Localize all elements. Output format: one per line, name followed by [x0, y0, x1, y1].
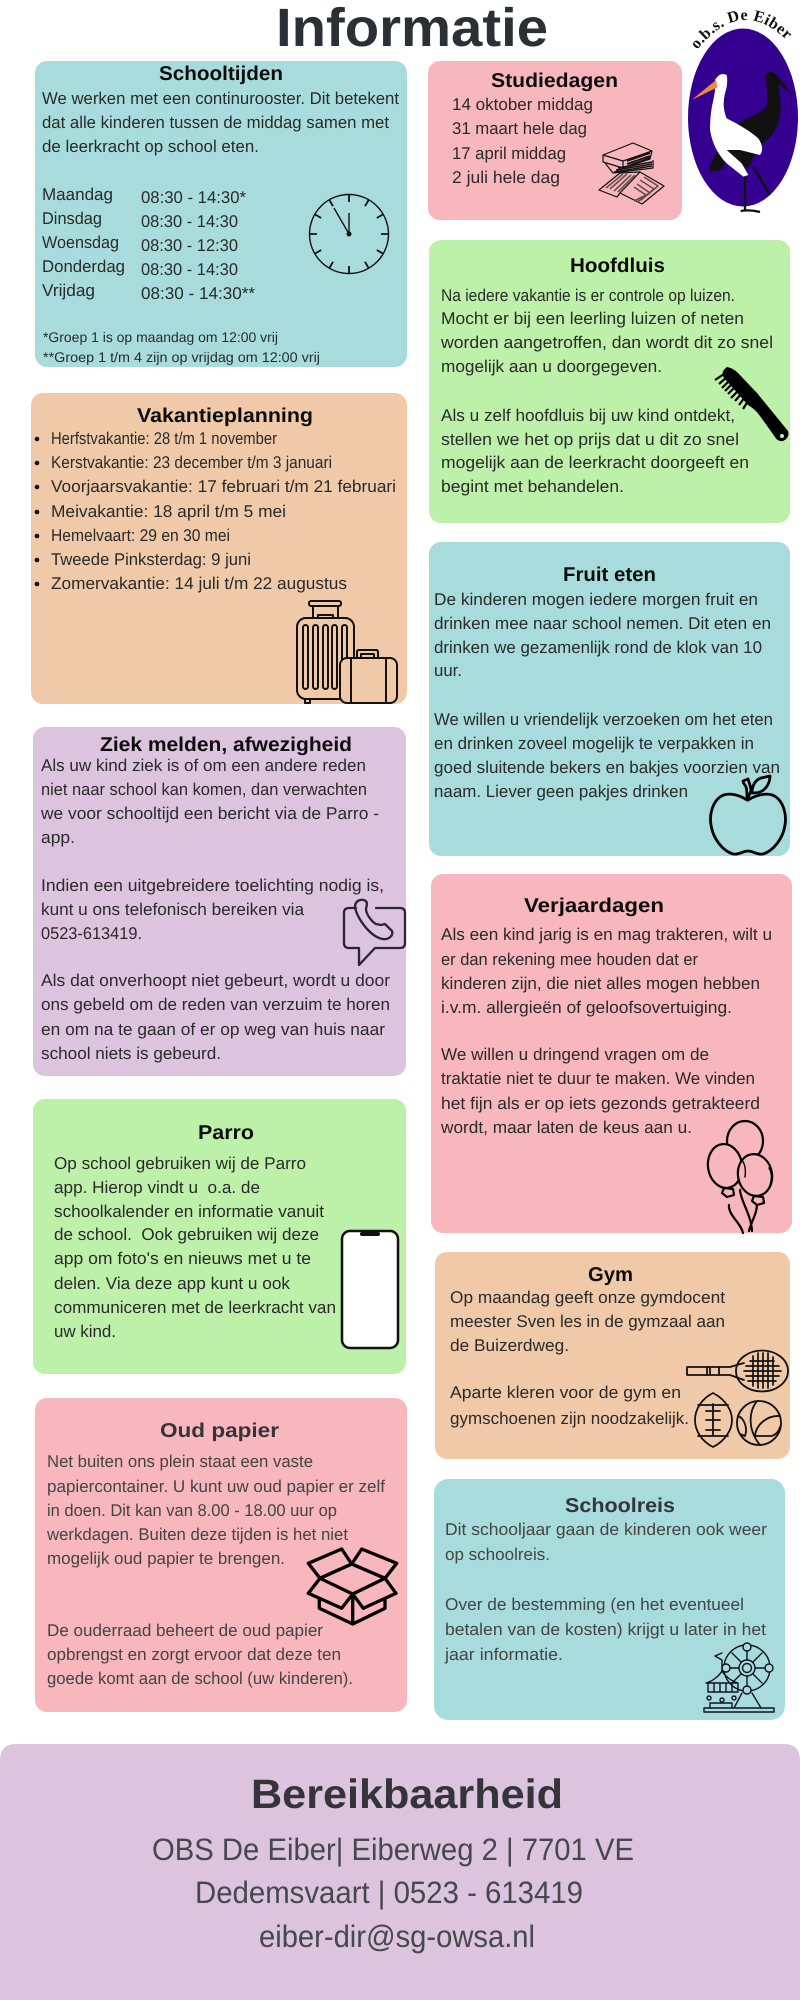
fruit text: naam. Liever geen pakjes drinken: [434, 782, 688, 801]
birthday text: i.v.m. allergieën of geloofsovertuiging.: [441, 998, 732, 1017]
gym text: gymschoenen zijn noodzakelijk.: [450, 1409, 689, 1428]
panel: Oud papier: [35, 1398, 407, 1712]
panel: Vakantieplanning: [31, 393, 407, 704]
footnotes: [43, 329, 320, 365]
holiday list: Herfstvakantie: 28 t/m 1 november: [51, 429, 277, 448]
school trip text: op schoolreis.: [445, 1545, 550, 1564]
lice text: worden aangetroffen, dan wordt dit zo snel: [440, 333, 773, 352]
intro text: dat alle kinderen tussen de middag samen met: [42, 113, 389, 132]
stork legs: [741, 167, 770, 212]
icon: books: [599, 143, 664, 204]
weekdays: Dinsdag: [42, 209, 102, 228]
lice text: mogelijk aan de leerkracht doorgeeft en: [441, 453, 749, 472]
fruit text: drinken we gezamenlijk rond de klok van 10: [434, 638, 762, 657]
panel: Ziek melden, afwezigheid: [33, 727, 406, 1076]
icon: apple: [710, 776, 786, 854]
Parro text: delen. Via deze app kunt u ook: [54, 1274, 290, 1293]
absence text: school niets is gebeurd.: [41, 1044, 221, 1063]
icon: luggage: [297, 601, 397, 703]
holiday list: Kerstvakantie: 23 december t/m 3 januari: [51, 453, 332, 472]
school trip text: jaar informatie.: [444, 1645, 563, 1664]
gym text: Aparte kleren voor de gym en: [450, 1383, 681, 1402]
birthday text: traktatie niet te duur te maken. We vinden: [441, 1069, 755, 1088]
heading: Verjaardagen: Verjaardagen: [524, 895, 664, 917]
study days list: [452, 95, 593, 187]
icon: basketball: [737, 1401, 781, 1445]
holiday list: Hemelvaart: 29 en 30 mei: [51, 526, 230, 545]
lice text: Na iedere vakantie is er controle op luizen.: [441, 286, 735, 305]
study days list: 14 oktober middag: [452, 95, 593, 114]
holiday list: Tweede Pinksterdag: 9 juni: [51, 550, 251, 569]
panel: Schooltijden: [35, 61, 407, 367]
Parro text: [54, 1154, 336, 1341]
Parro text: uw kind.: [54, 1322, 116, 1341]
icon: rugby ball: [695, 1393, 732, 1447]
absence text: Indien een uitgebreidere toelichting nodig is,: [41, 876, 384, 895]
paper text: papiercontainer. U kunt uw oud papier er zelf: [47, 1477, 385, 1496]
icon: clock: [310, 194, 388, 274]
birthday text: kinderen zijn, die niet alles mogen hebben: [441, 974, 760, 993]
intro text: [42, 89, 399, 156]
paper text: opbrengst en zorgt ervoor dat deze ten: [47, 1645, 341, 1664]
weekdays: Donderdag: [42, 257, 125, 276]
lice text: [440, 286, 773, 496]
paper text: Net buiten ons plein staat een vaste: [47, 1452, 313, 1471]
lice text: begint met behandelen.: [441, 477, 624, 496]
paper text: werkdagen. Buiten deze tijden is het niet: [46, 1525, 348, 1544]
heading: Parro: Parro: [198, 1122, 254, 1144]
black stork: [710, 72, 794, 172]
birthday text: er dan rekening mee houden dat er: [441, 950, 698, 969]
Parro text: Op school gebruiken wij de Parro: [54, 1154, 306, 1173]
absence text: Als dat onverhoopt niet gebeurt, wordt u door: [41, 971, 390, 990]
panel: Parro: [33, 1099, 406, 1374]
intro text: de leerkracht op school eten.: [42, 137, 259, 156]
gym text: de Buizerdweg.: [450, 1336, 569, 1355]
contact details: Dedemsvaart | 0523 - 613419: [195, 1875, 583, 1910]
paper text: De ouderraad beheert de oud papier: [47, 1621, 323, 1640]
holiday list: [35, 429, 396, 593]
absence text: [40, 756, 390, 1063]
heading: Fruit eten: Fruit eten: [563, 564, 656, 586]
icon: smartphone: [342, 1231, 398, 1348]
holiday list: Meivakantie: 18 april t/m 5 mei: [51, 502, 286, 521]
school times: 08:30 - 12:30: [141, 236, 238, 255]
absence text: 0523-613419.: [41, 924, 142, 943]
heading: Vakantieplanning: Vakantieplanning: [137, 405, 313, 427]
fruit text: We willen u vriendelijk verzoeken om het eten: [434, 710, 773, 729]
absence text: we voor schooltijd een bericht via de Parro -: [40, 804, 379, 823]
panel: Schoolreis: [434, 1479, 785, 1720]
gym text: meester Sven les in de gymzaal aan: [450, 1312, 725, 1331]
panel: Gym: [435, 1252, 790, 1459]
footnotes: *Groep 1 is op maandag om 12:00 vrij: [43, 329, 278, 345]
icon: balloons: [705, 1121, 775, 1233]
Parro text: de school. Ook gebruiken wij deze: [54, 1225, 319, 1244]
weekdays: Vrijdag: [42, 281, 95, 300]
panel: Verjaardagen: [431, 874, 792, 1233]
weekdays: Woensdag: [42, 233, 119, 252]
Parro text: app om foto's en nieuws met u te: [54, 1249, 311, 1268]
absence text: kunt u ons telefonisch bereiken via: [41, 900, 305, 919]
school trip text: Dit schooljaar gaan de kinderen ook weer: [445, 1520, 767, 1539]
school trip text: betalen van de kosten) krijgt u later in het: [445, 1620, 766, 1639]
absence text: ons gebeld om de reden van verzuim te horen: [41, 995, 390, 1014]
lice text: stellen we het op prijs dat u dit zo snel: [441, 430, 739, 449]
holiday list: Voorjaarsvakantie: 17 februari t/m 21 februari: [51, 477, 396, 496]
birthday text: [440, 925, 772, 1137]
study days list: 31 maart hele dag: [452, 119, 587, 138]
panel: Studiedagen: [428, 61, 682, 220]
absence text: niet naar school kan komen, dan verwachten: [41, 780, 367, 799]
heading: Schooltijden: Schooltijden: [159, 63, 283, 85]
lice text: Mocht er bij een leerling luizen of neten: [441, 309, 744, 328]
heading: Ziek melden, afwezigheid: Ziek melden, afwezigheid: [100, 734, 352, 756]
paper text: mogelijk oud papier te brengen.: [47, 1549, 285, 1568]
icon: ferris wheel and carousel: [704, 1643, 774, 1712]
fruit text: en drinken zoveel mogelijk te verpakken in: [434, 734, 754, 753]
intro text: We werken met een continurooster. Dit betekent: [42, 89, 399, 108]
lice text: Als u zelf hoofdluis bij uw kind ontdekt,: [441, 406, 735, 425]
contact details: [152, 1832, 634, 1954]
Parro text: app. Hierop vindt u o.a. de: [54, 1178, 260, 1197]
heading: Hoofdluis: Hoofdluis: [570, 255, 665, 277]
contact details: OBS De Eiber| Eiberweg 2 | 7701 VE: [152, 1832, 634, 1867]
school times: 08:30 - 14:30*: [141, 188, 246, 207]
panel: Bereikbaarheid: [0, 1744, 800, 2000]
birthday text: het fijn als er op iets gezonds getrakteerd: [441, 1094, 760, 1113]
fruit text: drinken mee naar school nemen. Dit eten en: [434, 614, 771, 633]
Parro text: communiceren met de leerkracht van: [54, 1298, 336, 1317]
gym text: [450, 1288, 725, 1428]
paper text: goede komt aan de school (uw kinderen).: [47, 1669, 353, 1688]
absence text: app.: [41, 828, 75, 847]
school times: 08:30 - 14:30: [141, 260, 238, 279]
absence text: Als uw kind ziek is of om een andere reden: [41, 756, 366, 775]
panel: Hoofdluis: [429, 240, 790, 523]
icon: comb: [715, 367, 788, 441]
weekdays: [42, 185, 125, 300]
study days list: 17 april middag: [452, 144, 566, 163]
gym text: Op maandag geeft onze gymdocent: [450, 1288, 725, 1307]
school times: 08:30 - 14:30**: [141, 284, 255, 303]
birthday text: wordt, maar laten de keus aan u.: [440, 1118, 692, 1137]
icon: open box: [308, 1549, 397, 1624]
fruit text: [434, 590, 780, 801]
study days list: 2 juli hele dag: [452, 168, 560, 187]
icon: tennis racket: [687, 1350, 788, 1392]
holiday list: Zomervakantie: 14 juli t/m 22 augustus: [51, 574, 347, 593]
school trip text: Over de bestemming (en het eventueel: [445, 1595, 744, 1614]
heading: Oud papier: Oud papier: [160, 1420, 279, 1442]
stork beak: [692, 80, 717, 100]
white stork: [710, 74, 762, 177]
birthday text: Als een kind jarig is en mag trakteren, wilt u: [441, 925, 772, 944]
school trip text: [444, 1520, 767, 1664]
birthday text: We willen u dringend vragen om de: [441, 1045, 709, 1064]
weekdays: Maandag: [42, 185, 113, 204]
heading: Schoolreis: Schoolreis: [565, 1495, 675, 1517]
fruit text: goed sluitende bekers en bakjes voorzien van: [434, 758, 780, 777]
heading: Gym: Gym: [588, 1264, 633, 1286]
paper text: in doen. Dit kan van 8.00 - 18.00 uur op: [47, 1501, 337, 1520]
school times: 08:30 - 14:30: [141, 212, 238, 231]
absence text: en om na te gaan of er op weg van huis naar: [41, 1020, 385, 1039]
fruit text: uur.: [434, 661, 462, 680]
fruit text: De kinderen mogen iedere morgen fruit en: [434, 590, 758, 609]
contact details: eiber-dir@sg-owsa.nl: [259, 1919, 535, 1954]
school times: [141, 188, 255, 303]
logo lettering: o.b.s. De Eiber: [693, 10, 792, 48]
heading: Bereikbaarheid: Bereikbaarheid: [251, 1771, 563, 1817]
paper text: [46, 1452, 385, 1688]
footnotes: **Groep 1 t/m 4 zijn op vrijdag om 12:00 vrij: [43, 349, 320, 365]
lice text: mogelijk aan u doorgegeven.: [441, 357, 662, 376]
logo: o.b.s. De Eiber: [688, 10, 798, 214]
Parro text: schoolkalender en informatie vanuit: [54, 1202, 324, 1221]
icon: phone speech bubble: [344, 900, 405, 965]
heading: Studiedagen: Studiedagen: [491, 70, 618, 92]
panel: Fruit eten: [429, 542, 790, 856]
